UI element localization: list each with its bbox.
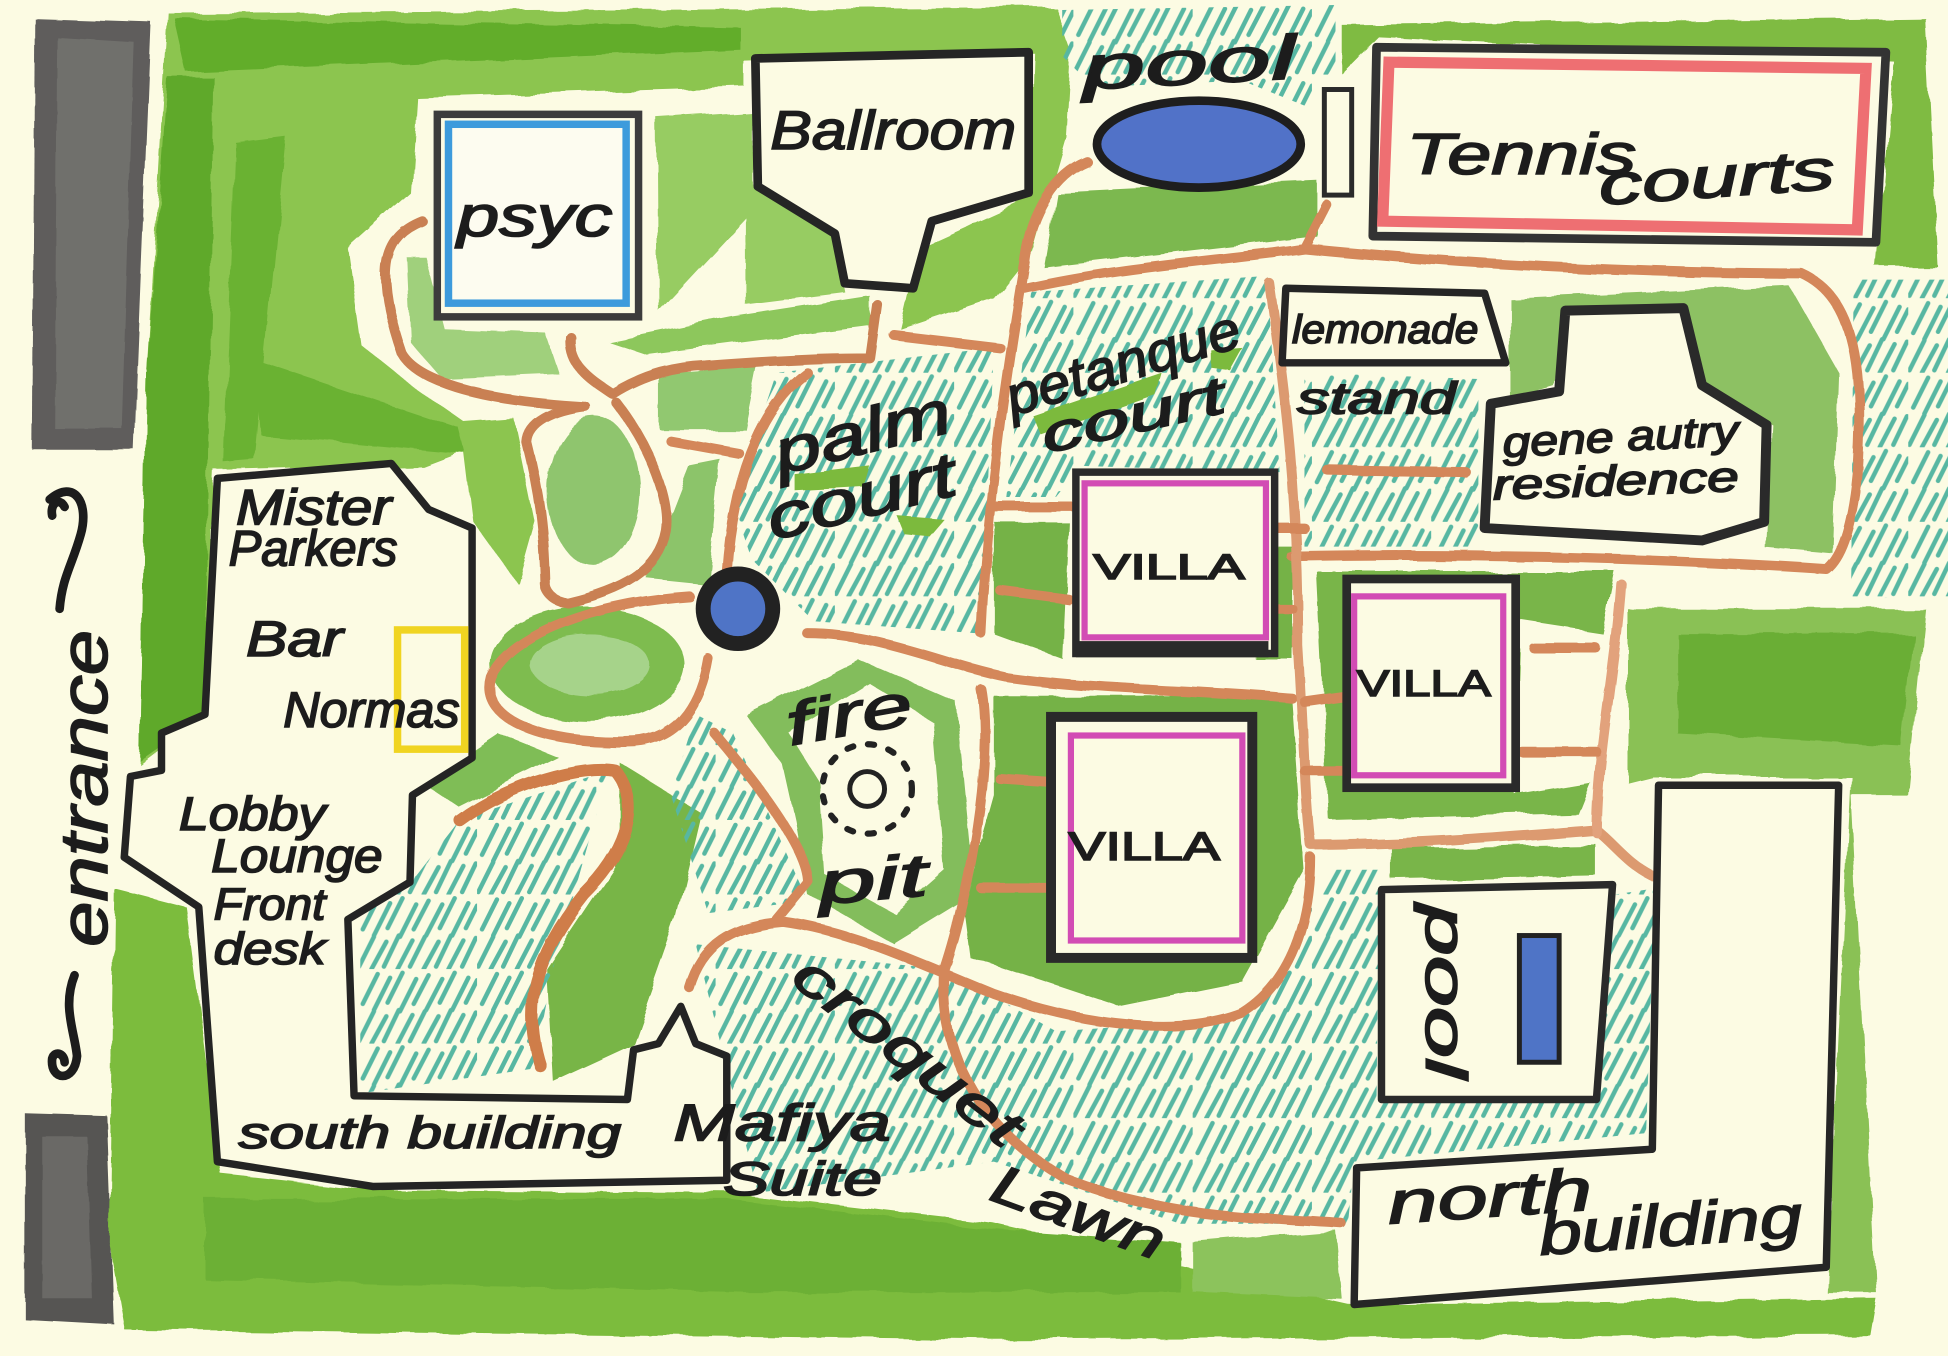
palm court label: palm (764, 378, 958, 489)
central fountain (703, 574, 773, 644)
building: tennis courts (1373, 47, 1886, 242)
pool: oval with label (1077, 23, 1352, 195)
main building: south building, lobby and bar (124, 463, 727, 1186)
lawn accents: green strokes in the courts (795, 348, 1242, 537)
building: tennis courts: courts (1597, 138, 1837, 218)
building: lemonade stand (1282, 288, 1506, 424)
villa three: VILLA (1068, 825, 1221, 869)
building: lemonade stand: lemonade (1292, 308, 1478, 352)
north building (1354, 785, 1839, 1305)
main building: south building, lobby and bar: Normas (283, 682, 460, 738)
main building: south building, lobby and bar: south building (239, 1109, 621, 1158)
building: ballroom (755, 52, 1029, 288)
main building: south building, lobby and bar: Lounge (211, 830, 383, 883)
roads: grey entrance blocks (25, 19, 152, 1324)
croquet lawn label: Lawn (984, 1153, 1174, 1272)
villa two (1347, 579, 1516, 788)
building: ballroom: Ballroom (770, 100, 1016, 161)
fire pit: label and dotted ring (781, 670, 934, 918)
main building: south building, lobby and bar: Bar (246, 611, 346, 667)
building: psyc: psyc (455, 185, 612, 249)
mafiya suite label: Mafiya (673, 1095, 891, 1153)
building: gene autry residence: gene autry (1501, 407, 1743, 466)
small pool building (1381, 885, 1613, 1100)
building: lemonade stand: stand (1297, 375, 1459, 424)
pool: oval with label: pool (1077, 23, 1301, 104)
entrance label with swirls (47, 492, 122, 1076)
fire pit: label and dotted ring: pit (812, 841, 934, 918)
building: gene autry residence (1485, 308, 1767, 540)
croquet lawn label: croquet (782, 943, 1038, 1162)
entrance label with swirls: entrance (47, 630, 122, 947)
small pool building: pool (1413, 901, 1477, 1080)
north building: building (1537, 1183, 1804, 1268)
petanque court label: court (1036, 366, 1234, 465)
villa one (1076, 472, 1275, 657)
main building: south building, lobby and bar: Front (214, 880, 327, 929)
building: gene autry residence: residence (1492, 453, 1739, 508)
north building: north (1385, 1156, 1594, 1237)
villa one: VILLA (1093, 549, 1246, 587)
mafiya suite label: Suite (723, 1153, 882, 1206)
croquet lawn label (782, 943, 1174, 1272)
palm court label (759, 378, 967, 554)
building: tennis courts: Tennis (1406, 123, 1636, 187)
building: psyc (437, 114, 639, 317)
main building: south building, lobby and bar: Mister (236, 479, 394, 535)
fire pit: label and dotted ring: fire (781, 670, 917, 758)
petanque court label: petanque (996, 299, 1248, 428)
villa two: VILLA (1357, 662, 1491, 704)
main building: south building, lobby and bar: desk (214, 925, 329, 974)
palm court label: court (759, 440, 967, 554)
main building: south building, lobby and bar: Lobby (179, 788, 328, 841)
footpaths: orange network (386, 162, 1859, 1224)
grass: teal crayon hatching (360, 5, 1948, 1224)
villa three (1051, 717, 1252, 958)
main building: south building, lobby and bar: Parkers (229, 520, 398, 576)
mafiya suite label (673, 1095, 891, 1206)
